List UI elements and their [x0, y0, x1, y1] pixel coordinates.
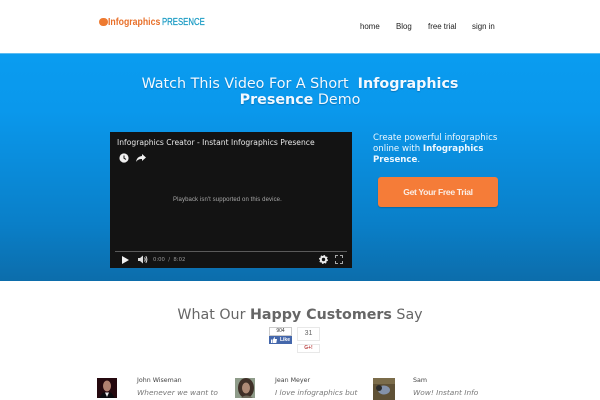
testimonials heading: What Our Happy Customers Say: [177, 307, 423, 323]
google plus widget: [297, 327, 320, 353]
quote: Sam: Wow! Instant Info: [413, 388, 478, 397]
logo wordmark: [108, 16, 205, 28]
nav: sign in: sign in: [472, 22, 495, 31]
like button: [269, 336, 292, 344]
logo icon: [99, 18, 108, 26]
logo wordmark: Infographics: [108, 16, 160, 28]
progress bar: [115, 251, 347, 252]
testimonial: Sam: [373, 377, 478, 400]
icon: thumbs up: [271, 337, 277, 343]
avatar: Sam: [373, 378, 395, 400]
plus count: [297, 327, 320, 341]
icon: watch later clock: [119, 153, 129, 163]
quote: John: Whenever we want to: [137, 388, 218, 397]
like count: 904: [276, 328, 285, 334]
name: John Wiseman: John Wiseman: [137, 377, 182, 384]
navigation menu: [360, 22, 495, 31]
hero description: Create powerful infographics online with Infographics Presence.: [373, 133, 497, 165]
avatar: Jean: [235, 378, 255, 398]
nav: blog: Blog: [396, 22, 412, 31]
testimonial: Jean Meyer: [235, 377, 358, 398]
testimonial: John Wiseman: [97, 377, 218, 398]
name: Jean Meyer: Jean Meyer: [275, 377, 310, 384]
facebook like widget: [269, 327, 292, 344]
nav: home: home: [360, 22, 380, 31]
like button: Like: [280, 337, 290, 343]
icon: volume: [138, 256, 148, 264]
hero panel: [0, 53, 600, 281]
like count: [269, 327, 292, 336]
video title: Infographics Creator - Instant Infographics Presence: [117, 138, 315, 147]
nav: free trial: free trial: [428, 22, 457, 31]
call to action button: Get Your Free Trial: [403, 187, 473, 197]
plus count: 31: [305, 330, 312, 337]
name: Sam: Sam: [413, 377, 427, 384]
video player: [110, 132, 352, 268]
icon: play: [122, 256, 129, 264]
plus button: [297, 344, 320, 353]
quote: Jean: I love infographics but: [275, 388, 357, 397]
plus button: G+!: [304, 345, 313, 351]
icon: fullscreen: [335, 255, 343, 264]
hero heading: Watch This Video For A Short Infographics Presence Demo: [142, 76, 458, 108]
header logo: [99, 16, 205, 28]
icon: share arrow: [136, 154, 146, 162]
avatar: John: [97, 378, 117, 398]
video time: 0:00 / 8:02: [153, 257, 185, 263]
logo wordmark: PRESENCE: [162, 16, 205, 28]
playback message: Playback isn't supported on this device.: [173, 197, 282, 203]
call to action button: [378, 177, 498, 207]
icon: settings gear: [319, 255, 328, 264]
